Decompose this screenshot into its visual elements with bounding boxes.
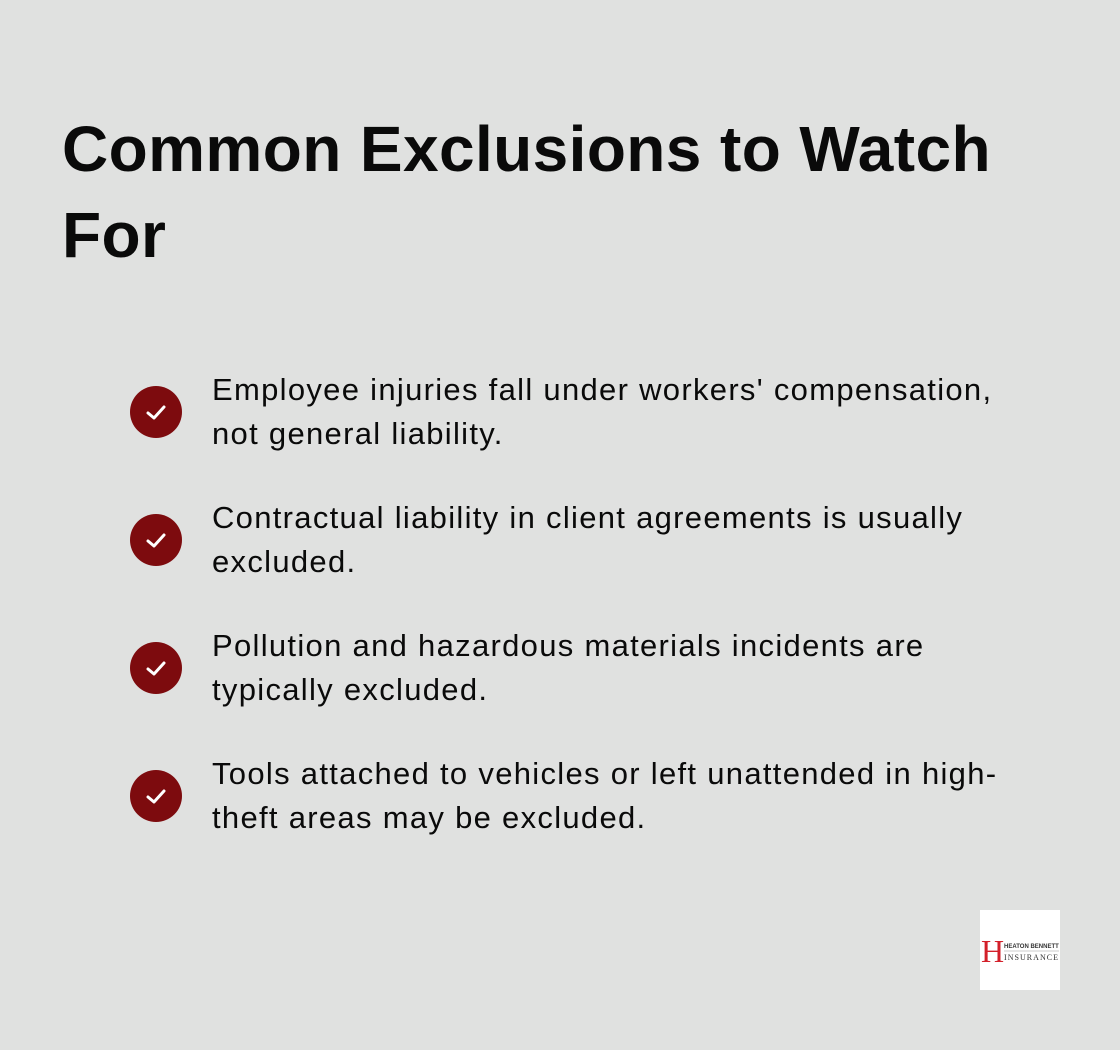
icon: check bbox=[130, 514, 182, 566]
text 3: typically excluded. bbox=[212, 672, 488, 707]
icon: check bbox=[130, 386, 182, 438]
text 1: Employee injuries fall under workers' compensation, bbox=[212, 372, 992, 407]
text 3: Pollution and hazardous materials incidents are bbox=[212, 628, 924, 663]
logo: INSURANCE bbox=[1004, 953, 1058, 962]
text 4: theft areas may be excluded. bbox=[212, 800, 646, 835]
text 4: Tools attached to vehicles or left unattended in high- bbox=[212, 756, 997, 791]
item 4 bbox=[130, 756, 997, 835]
icon: check bbox=[130, 642, 182, 694]
title bbox=[62, 113, 991, 271]
text 2: Contractual liability in client agreements is usually bbox=[212, 500, 963, 535]
title: For bbox=[62, 199, 166, 271]
item 1 bbox=[130, 372, 992, 451]
logo: HEATON BENNETT bbox=[1004, 944, 1059, 950]
text 2 bbox=[212, 500, 963, 579]
text 4 bbox=[212, 756, 997, 835]
text 2: excluded. bbox=[212, 544, 356, 579]
text 1 bbox=[212, 372, 992, 451]
logo: H bbox=[981, 933, 1004, 969]
title: Common Exclusions to Watch bbox=[62, 113, 991, 185]
text 3 bbox=[212, 628, 924, 707]
icon: check bbox=[130, 770, 182, 822]
text 1: not general liability. bbox=[212, 416, 504, 451]
logo bbox=[980, 910, 1060, 990]
item 2 bbox=[130, 500, 963, 579]
item 3 bbox=[130, 628, 924, 707]
